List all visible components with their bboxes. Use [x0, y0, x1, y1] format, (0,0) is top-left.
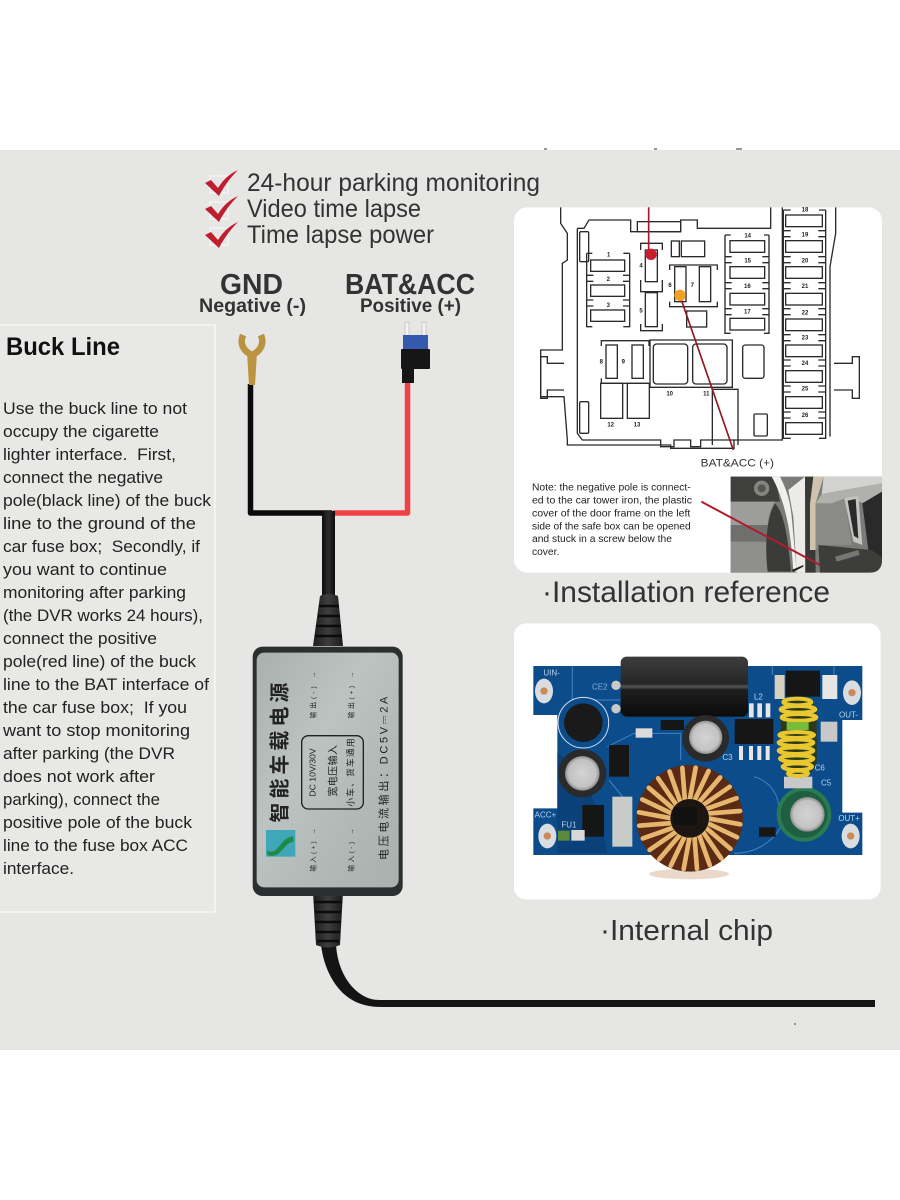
fuse numbers: [600, 208, 809, 428]
small artifact marks: [544, 149, 796, 1024]
description text: the car fuse box; If you: [3, 699, 187, 717]
description text: want to stop monitoring: [2, 722, 190, 740]
fuse numbers: 3: [607, 303, 611, 309]
board labels: C3: [722, 753, 733, 762]
fuse bank 14-17: [725, 235, 769, 333]
board labels: C5: [821, 779, 832, 788]
input and output arrow labels: 输出(-) →: [308, 672, 317, 718]
description text: monitoring after parking: [3, 584, 186, 602]
fuse numbers: 11: [703, 391, 710, 397]
description text: pole(black line) of the buck: [3, 492, 212, 510]
module spec box: 小车、货车通用: [344, 738, 355, 807]
large copper toroid: [636, 765, 743, 879]
fuse numbers: 21: [802, 284, 809, 290]
description text: lighter interface. First,: [3, 446, 176, 464]
GND heading: GND: [220, 269, 283, 301]
description text: car fuse box; Secondly, if: [3, 538, 200, 556]
side mounting tabs: [541, 357, 859, 398]
fuse numbers: 20: [802, 258, 809, 264]
board labels: ACC+: [535, 811, 557, 820]
input and output arrow labels: 输入(-) →: [346, 828, 355, 872]
fuse box outline: [541, 207, 782, 448]
fuses 6 and 7: [670, 241, 717, 327]
icon: check 3: [205, 222, 238, 248]
fuse numbers: 14: [744, 233, 752, 239]
label: BAT and ACC: BAT&ACC (+): [701, 458, 774, 470]
large black inductor: [611, 657, 748, 717]
description text: (the DVR works 24 hours),: [3, 607, 203, 625]
board labels: CE2: [592, 683, 608, 692]
fuse numbers: 26: [802, 413, 809, 419]
fuses 8 and 9: [601, 341, 649, 418]
black push cap: [558, 697, 609, 748]
feature: 24-hour parking monitoring: 24-hour parking monitoring: [247, 169, 540, 197]
wiring harness: [242, 322, 875, 1007]
feature checklist: [205, 169, 540, 249]
description text: Use the buck line to not: [3, 400, 187, 418]
fuse numbers: 17: [744, 310, 751, 316]
installation note: [532, 483, 692, 558]
surface mount chips: [558, 671, 837, 847]
background band: [0, 150, 900, 1050]
fuse numbers: 18: [802, 208, 809, 214]
black wire: [250, 384, 332, 513]
car door photo: [701, 477, 882, 573]
input and output arrow labels: 输出(+) →: [346, 672, 355, 718]
checkbox outlines: [210, 176, 228, 245]
fuse bank 1-3: [587, 253, 630, 327]
installation note: cover of the door frame on the left: [532, 508, 691, 519]
installation note: ed to the car tower iron, the plastic: [532, 495, 692, 506]
caption: internal chip: ·Internal chip: [600, 915, 773, 947]
module spec box: DC 10V/30V: [308, 748, 317, 797]
description text: connect the negative: [3, 469, 163, 487]
icon: spade terminal: [242, 335, 262, 385]
fuses 4 and 5: [641, 243, 662, 331]
installation note: cover.: [532, 547, 559, 558]
description text: line to the fuse box ACC: [3, 837, 188, 855]
positive tap marker and leader: [674, 290, 733, 450]
fuse numbers: 15: [744, 258, 752, 264]
relays 10 and 11: [580, 222, 767, 445]
fuse numbers: 9: [622, 360, 626, 366]
board labels: [535, 668, 860, 829]
fuse numbers: 7: [691, 283, 695, 289]
module spec box: [302, 736, 363, 809]
callout leader line: [701, 502, 820, 565]
description text: interface.: [3, 860, 74, 878]
fuse numbers: 8: [600, 360, 604, 366]
panel: internal chip: [514, 623, 881, 899]
icon: blade fuse tap: [401, 322, 430, 383]
description text: you want to continue: [3, 561, 167, 579]
fuse numbers: 22: [802, 310, 809, 316]
fuse numbers: 1: [607, 252, 611, 258]
description text: after parking (the DVR: [3, 745, 175, 763]
mounting holes: [535, 679, 861, 848]
fuse numbers: 4: [639, 263, 643, 269]
lower strain relief and cable: [313, 892, 875, 1007]
capacitors: [558, 715, 831, 842]
description text: positive pole of the buck: [3, 814, 193, 832]
upper strain relief: [313, 594, 343, 646]
negative tap marker: [645, 207, 657, 260]
circuit board: [533, 666, 862, 855]
main cable: [322, 511, 335, 601]
fuse numbers: 23: [802, 335, 809, 341]
board labels: L2: [754, 693, 763, 702]
module spec box: 宽电压输入: [327, 745, 340, 797]
negative label: Negative (-): [199, 296, 306, 317]
board labels: OUT+: [838, 814, 860, 823]
installation note: and stuck in a screw below the: [532, 534, 672, 545]
description text: pole(red line) of the buck: [3, 653, 197, 671]
module: buck converter box: [253, 647, 403, 896]
description text: line to the ground of the: [3, 515, 196, 533]
icon: module logo: [266, 830, 295, 857]
description text: [2, 400, 212, 878]
red wire: [333, 382, 408, 513]
board labels: FU1: [561, 820, 577, 829]
board labels: OUT-: [839, 711, 858, 720]
description text: connect the positive: [3, 630, 157, 648]
fuse numbers: 19: [802, 233, 809, 239]
fuse numbers: 25: [802, 387, 809, 393]
fuse numbers: 12: [607, 422, 615, 428]
description text: line to the BAT interface of: [3, 676, 209, 694]
fuse numbers: 13: [634, 422, 641, 428]
BAT and ACC heading: BAT&ACC: [345, 269, 475, 301]
feature: video time lapse: Video time lapse: [247, 195, 421, 223]
fuse numbers: 10: [666, 391, 674, 397]
fuse numbers: 5: [639, 309, 643, 315]
positive label: Positive (+): [360, 296, 461, 317]
fuse box diagram: [541, 207, 859, 448]
panel: fuse box installation reference: [514, 207, 882, 573]
installation note: Note: the negative pole is connect-: [532, 483, 691, 494]
description text: occupy the cigarette: [3, 423, 159, 441]
icon: check 2: [205, 196, 238, 222]
board labels: UIN-: [543, 668, 560, 677]
description text: does not work after: [3, 768, 156, 786]
fuse numbers: 16: [744, 284, 751, 290]
input and output arrow labels: 输入(+) →: [308, 828, 317, 872]
right fuse bank 18-26: [783, 207, 836, 438]
panel: buck line description: [0, 325, 215, 912]
installation note: side of the safe box can be opened: [532, 521, 691, 532]
heading: Buck Line: Buck Line: [6, 333, 120, 361]
output rating text: 电压电流输出：DC5V⎓2A: [376, 696, 390, 860]
fuse numbers: 6: [668, 283, 672, 289]
fuse numbers: 24: [802, 361, 809, 367]
input and output arrow labels: [308, 672, 355, 872]
fuse numbers: 2: [607, 277, 611, 283]
description text: parking), connect the: [3, 791, 160, 809]
module title: 智能车载电源: [268, 683, 292, 823]
small yellow coil: [779, 697, 817, 776]
board labels: C6: [815, 764, 825, 773]
icon: check 1: [205, 170, 238, 196]
feature: time lapse power: Time lapse power: [247, 221, 434, 249]
caption: installation reference: ·Installation reference: [542, 576, 830, 609]
